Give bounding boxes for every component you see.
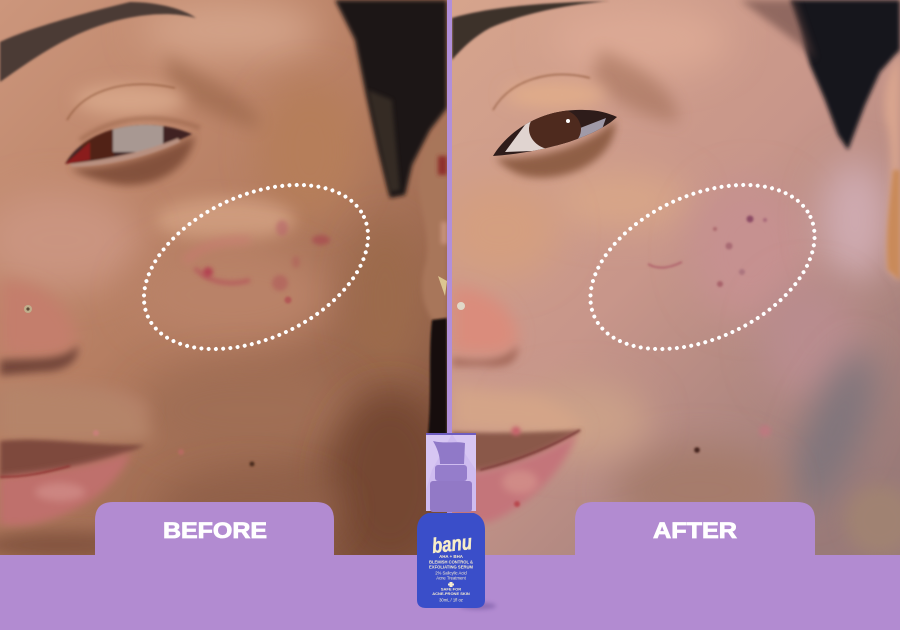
bottle label: EXFOLIATING SERUM bbox=[429, 564, 473, 570]
bottle label: ACNE-PRONE SKIN bbox=[432, 591, 470, 596]
upper lip skin bbox=[455, 390, 566, 430]
ear shadow bbox=[887, 170, 900, 280]
skin tones bbox=[456, 13, 898, 527]
panel: before photo bbox=[0, 0, 450, 570]
dotted ellipse: before bbox=[118, 152, 394, 382]
hair bbox=[335, 0, 447, 198]
eyebrow bbox=[0, 2, 196, 82]
acne marks bbox=[185, 220, 330, 304]
dotted ellipse: after bbox=[564, 152, 841, 382]
centre divider bbox=[447, 0, 452, 556]
tab: after bbox=[575, 502, 815, 556]
bottle label: 30mL / 1fl oz bbox=[439, 598, 463, 602]
panel: after photo bbox=[440, 0, 900, 556]
nose bbox=[452, 285, 518, 367]
eye shadow bbox=[67, 55, 259, 185]
bottle label: 2% Salicylic Acid bbox=[435, 570, 467, 576]
bottle label: BLEMISH CONTROL & bbox=[429, 560, 474, 564]
upper lip skin bbox=[106, 422, 150, 441]
skin marks bbox=[93, 430, 254, 466]
eye shadow bbox=[493, 50, 678, 178]
eyebrow bbox=[452, 1, 610, 60]
neck shadow bbox=[428, 318, 447, 435]
pump cap bbox=[426, 433, 476, 512]
hair bbox=[790, 0, 900, 150]
acne marks bbox=[648, 216, 767, 287]
bottle label: banu bbox=[431, 531, 473, 558]
ear bbox=[422, 154, 447, 319]
lips bbox=[0, 440, 145, 525]
bottom band bbox=[0, 555, 900, 630]
lips bbox=[452, 430, 582, 525]
tab: before: BEFORE bbox=[163, 518, 267, 543]
eye bbox=[493, 108, 617, 156]
nose bbox=[0, 280, 78, 376]
bottle label: Acne Treatment bbox=[436, 576, 467, 580]
eye bbox=[65, 120, 192, 167]
hair fringe bbox=[740, 0, 815, 60]
skin tones bbox=[0, 0, 450, 570]
bottle label: SAFE FOR bbox=[441, 586, 461, 592]
tab: after: AFTER bbox=[653, 518, 737, 543]
ear bbox=[884, 55, 900, 282]
bottle body bbox=[417, 513, 485, 608]
bottle label bbox=[429, 531, 474, 602]
skin marks bbox=[512, 425, 771, 507]
bottle label: AHA + BHA bbox=[439, 554, 464, 559]
hair lowlight bbox=[368, 90, 400, 192]
bottle shadow bbox=[460, 602, 496, 610]
tab: before bbox=[95, 502, 334, 556]
product: serum bottle bbox=[417, 433, 496, 610]
